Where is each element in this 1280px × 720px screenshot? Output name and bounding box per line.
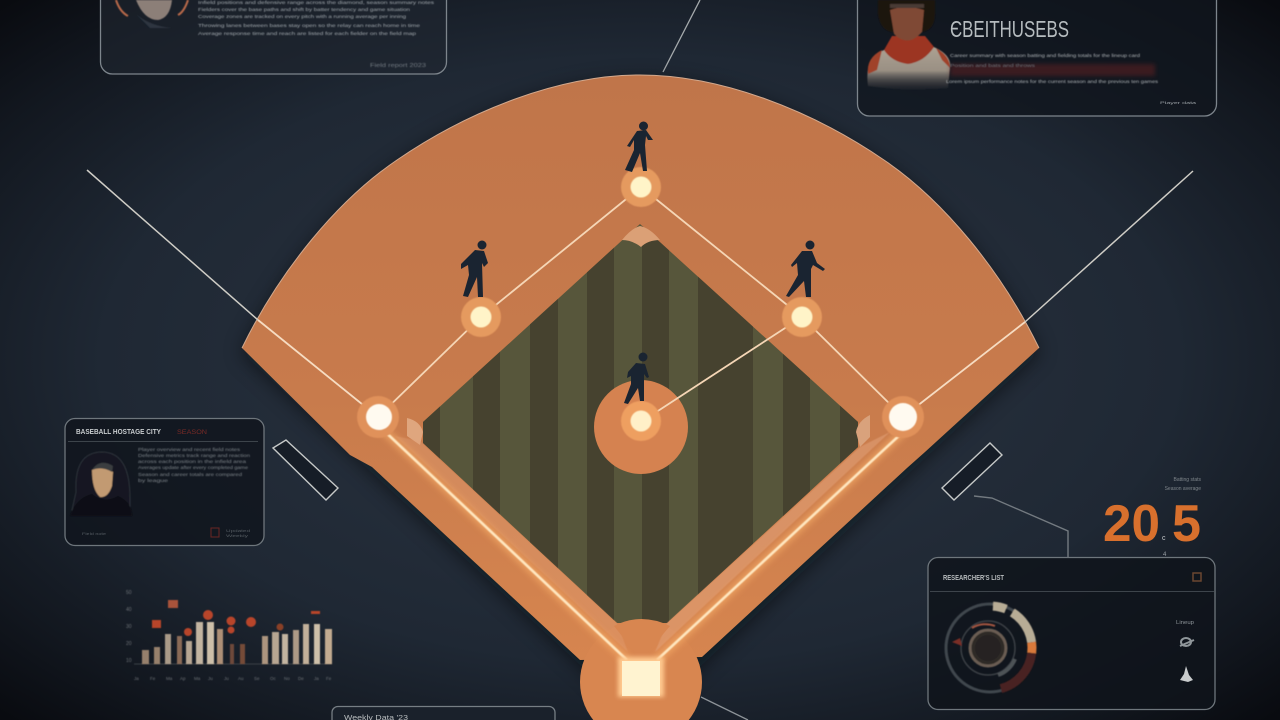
home plate circle: [580, 621, 702, 720]
base: third: [357, 396, 399, 438]
x axis labels: [134, 676, 332, 681]
text block: left card: [138, 447, 251, 483]
base: right infield: [782, 297, 822, 337]
heading: player name: ЄBEITHUSEBS: [950, 16, 1069, 42]
foul line: right: [1025, 171, 1193, 322]
icon: player portrait: [867, 0, 950, 90]
batter's box: right: [942, 443, 1002, 500]
value: 20.5: 20: [1103, 495, 1160, 553]
heading: gauge card: RESEARCHER'S LIST: [943, 575, 1005, 582]
x axis labels: De: [298, 676, 304, 681]
player: pitcher: [624, 352, 649, 404]
legend: gauge card: Lineup: [1176, 620, 1194, 626]
caption: number label: Season average: [1165, 486, 1201, 492]
caption: number label: [1165, 477, 1201, 492]
base: second: [621, 167, 661, 207]
panel: top-left profile card: [100, 0, 446, 74]
text block: player description: Career summary with season batting and fielding totals for the lineup card: [950, 53, 1141, 58]
panel: left profile card: [65, 418, 264, 546]
caption: left card footer: Weekly: [226, 533, 248, 538]
panel: right gauge card: [928, 558, 1215, 710]
foul line highlights: [258, 320, 1025, 417]
icon: swirl: [1180, 638, 1194, 646]
x axis labels: Au: [238, 676, 244, 681]
caption: left card footer: Field note: [82, 531, 107, 536]
x axis labels: Ma: [166, 676, 173, 681]
text block: left card: by league: [138, 478, 169, 483]
x axis labels: Fe: [150, 676, 156, 681]
x axis labels: No: [284, 676, 290, 681]
text block: left card: across each position in the infield area: [138, 459, 247, 464]
text block: left card: Season and career totals are compared: [138, 472, 243, 477]
home plate dome: [614, 619, 670, 660]
pitcher's mound: [594, 380, 688, 474]
player: right fielder: [786, 240, 825, 297]
base: left infield: [461, 297, 501, 337]
text block: left card: Averages update after every completed game: [138, 465, 249, 470]
callout: big number: [1103, 477, 1201, 558]
x axis labels: Se: [254, 676, 260, 681]
heading: left card: BASEBALL HOSTAGE CITY: [76, 429, 161, 436]
panel: top-right player card: [858, 0, 1216, 116]
red markers: [152, 600, 320, 636]
x axis labels: Ju: [224, 676, 229, 681]
connector: box to panel: [974, 496, 1068, 557]
panel: bottom card: [332, 706, 555, 720]
icon: header badge: [1193, 573, 1201, 581]
text block: top-left description: Average response time and reach are listed for each fielder on the field map: [198, 31, 417, 36]
base path bands: [395, 436, 628, 652]
outfield fan: [242, 75, 1039, 660]
caption: top-left footer: Field report 2023: [370, 63, 426, 69]
y axis labels: [126, 590, 132, 664]
text block: player description: [946, 53, 1158, 84]
text block: top-left description: Fielders cover the base paths and shift by batter tendency and game situation: [198, 7, 411, 12]
base: first: [882, 396, 924, 438]
accent bar: [950, 64, 1155, 76]
callout: big number: 4: [1163, 552, 1167, 558]
leader line: top: [663, 0, 700, 72]
glowing baselines: [378, 425, 903, 660]
x axis labels: Ma: [194, 676, 201, 681]
y axis labels: 10: [126, 658, 132, 664]
callout: big number: c: [1162, 535, 1166, 542]
player: top fielder: [625, 122, 653, 172]
infield grass diamond: [423, 224, 858, 623]
x axis labels: Ja: [134, 676, 139, 681]
label: red tag: SEASON: [177, 430, 207, 436]
bases: [357, 167, 924, 697]
y axis labels: 30: [126, 624, 132, 630]
baseball field: [242, 75, 1039, 720]
base: pitcher: [621, 401, 661, 441]
caption: top-right footer: Player data: [1160, 100, 1197, 105]
batter's box: left: [273, 440, 338, 500]
players: [461, 122, 825, 404]
text block: left card: Player overview and recent field notes: [138, 447, 240, 452]
home plate: [618, 657, 664, 697]
x axis labels: Ja: [314, 676, 319, 681]
caption: left card footer: Updated: [226, 528, 250, 533]
y axis labels: 50: [126, 590, 132, 596]
bar chart: [126, 590, 332, 681]
caption: left card footer: [82, 528, 250, 538]
text block: top-left description: [198, 0, 435, 36]
outfield edge highlight: [242, 75, 1039, 348]
donut gauge: [946, 604, 1034, 692]
text block: player description: Lorem ipsum performance notes for the current season and the previous ten games: [946, 79, 1158, 84]
player: left fielder: [461, 240, 488, 297]
y axis labels: 40: [126, 607, 132, 613]
icon: small red marker: [211, 528, 219, 537]
y axis labels: 20: [126, 641, 132, 647]
text block: left card: Defensive metrics track range and reaction: [138, 453, 251, 458]
infield corner cutouts: [622, 226, 660, 247]
bars: [142, 622, 332, 664]
icon: portrait top-left: [116, 0, 188, 28]
icon: marker: [1180, 666, 1193, 682]
caption: number label: Batting stats: [1173, 477, 1201, 483]
text block: top-left description: Throwing lanes between bases stay open so the relay can reach home in time: [198, 23, 421, 28]
x axis labels: Ju: [208, 676, 213, 681]
base path lines: [378, 187, 903, 422]
text block: player description: Position and bats and throws: [950, 63, 1035, 68]
x axis labels: Ap: [180, 676, 186, 681]
foul line: left: [87, 170, 258, 320]
text block: top-left description: Coverage zones are tracked on every pitch with a running average per inning: [198, 14, 407, 19]
icon: portrait left: [70, 452, 132, 516]
callout: big number: 5: [1172, 495, 1201, 553]
x axis labels: Oc: [270, 676, 277, 681]
text block: top-left description: Infield positions and defensive range across the diamond, season summary notes: [198, 0, 435, 5]
x axis labels: Fe: [326, 676, 332, 681]
legend: gauge card: [1176, 620, 1194, 682]
field shadow: [242, 80, 1039, 720]
leader line: bottom: [701, 697, 748, 720]
